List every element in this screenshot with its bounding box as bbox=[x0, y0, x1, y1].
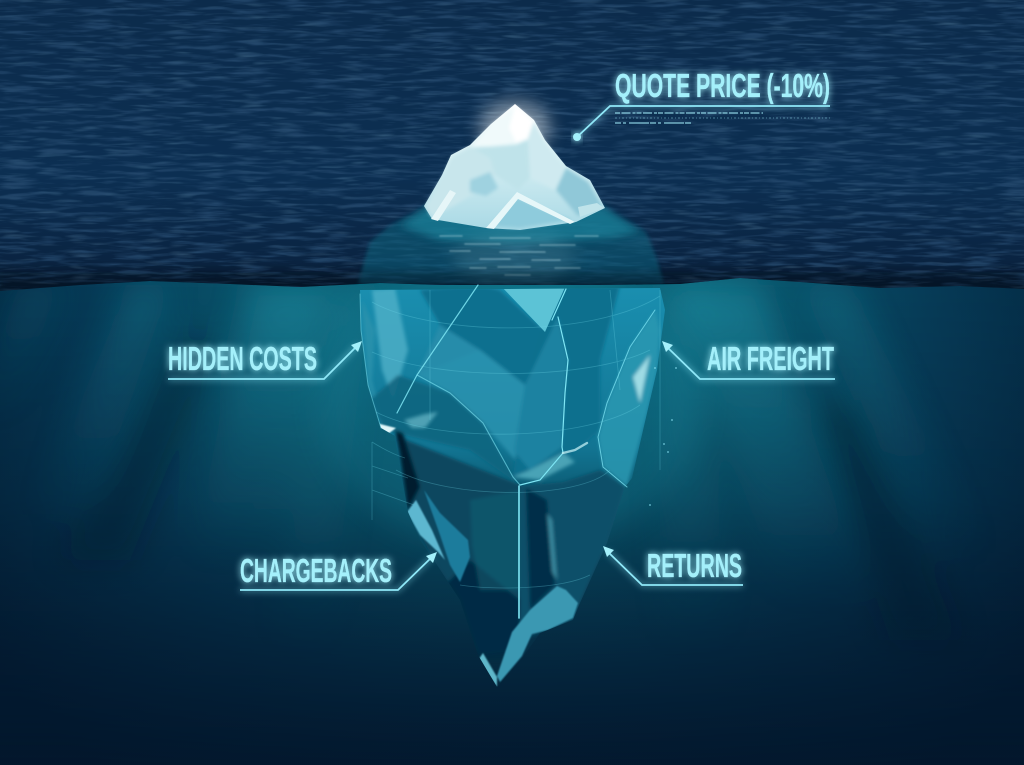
wireframe grid bbox=[372, 290, 660, 588]
glow behind iceberg bbox=[320, 250, 700, 550]
callout: quote price: QUOTE PRICE (-10%) bbox=[615, 67, 830, 104]
callout: quote price bbox=[573, 67, 830, 141]
light rays bbox=[0, 285, 990, 650]
panel: ocean surface bbox=[0, 0, 1024, 295]
callout: hidden costs: HIDDEN COSTS bbox=[168, 340, 317, 377]
iceberg: underwater mass bbox=[360, 284, 665, 687]
submerged shelf through water bbox=[358, 204, 664, 284]
water reflections bbox=[440, 236, 598, 275]
sparkle particles bbox=[649, 367, 677, 506]
dark waterline edge bbox=[0, 272, 1024, 292]
callout: air freight bbox=[662, 340, 835, 379]
depth fade bbox=[0, 285, 1024, 765]
facets bbox=[362, 285, 660, 660]
callout: returns bbox=[603, 546, 743, 585]
bright ridge lines bbox=[360, 285, 655, 618]
callout: air freight: AIR FREIGHT bbox=[707, 340, 834, 377]
callout: returns: RETURNS bbox=[647, 547, 742, 584]
callout: chargebacks: CHARGEBACKS bbox=[240, 552, 392, 589]
iceberg tip bbox=[424, 104, 605, 230]
iceberg: glow at tip bbox=[479, 100, 551, 156]
underwater background bbox=[0, 270, 1024, 765]
